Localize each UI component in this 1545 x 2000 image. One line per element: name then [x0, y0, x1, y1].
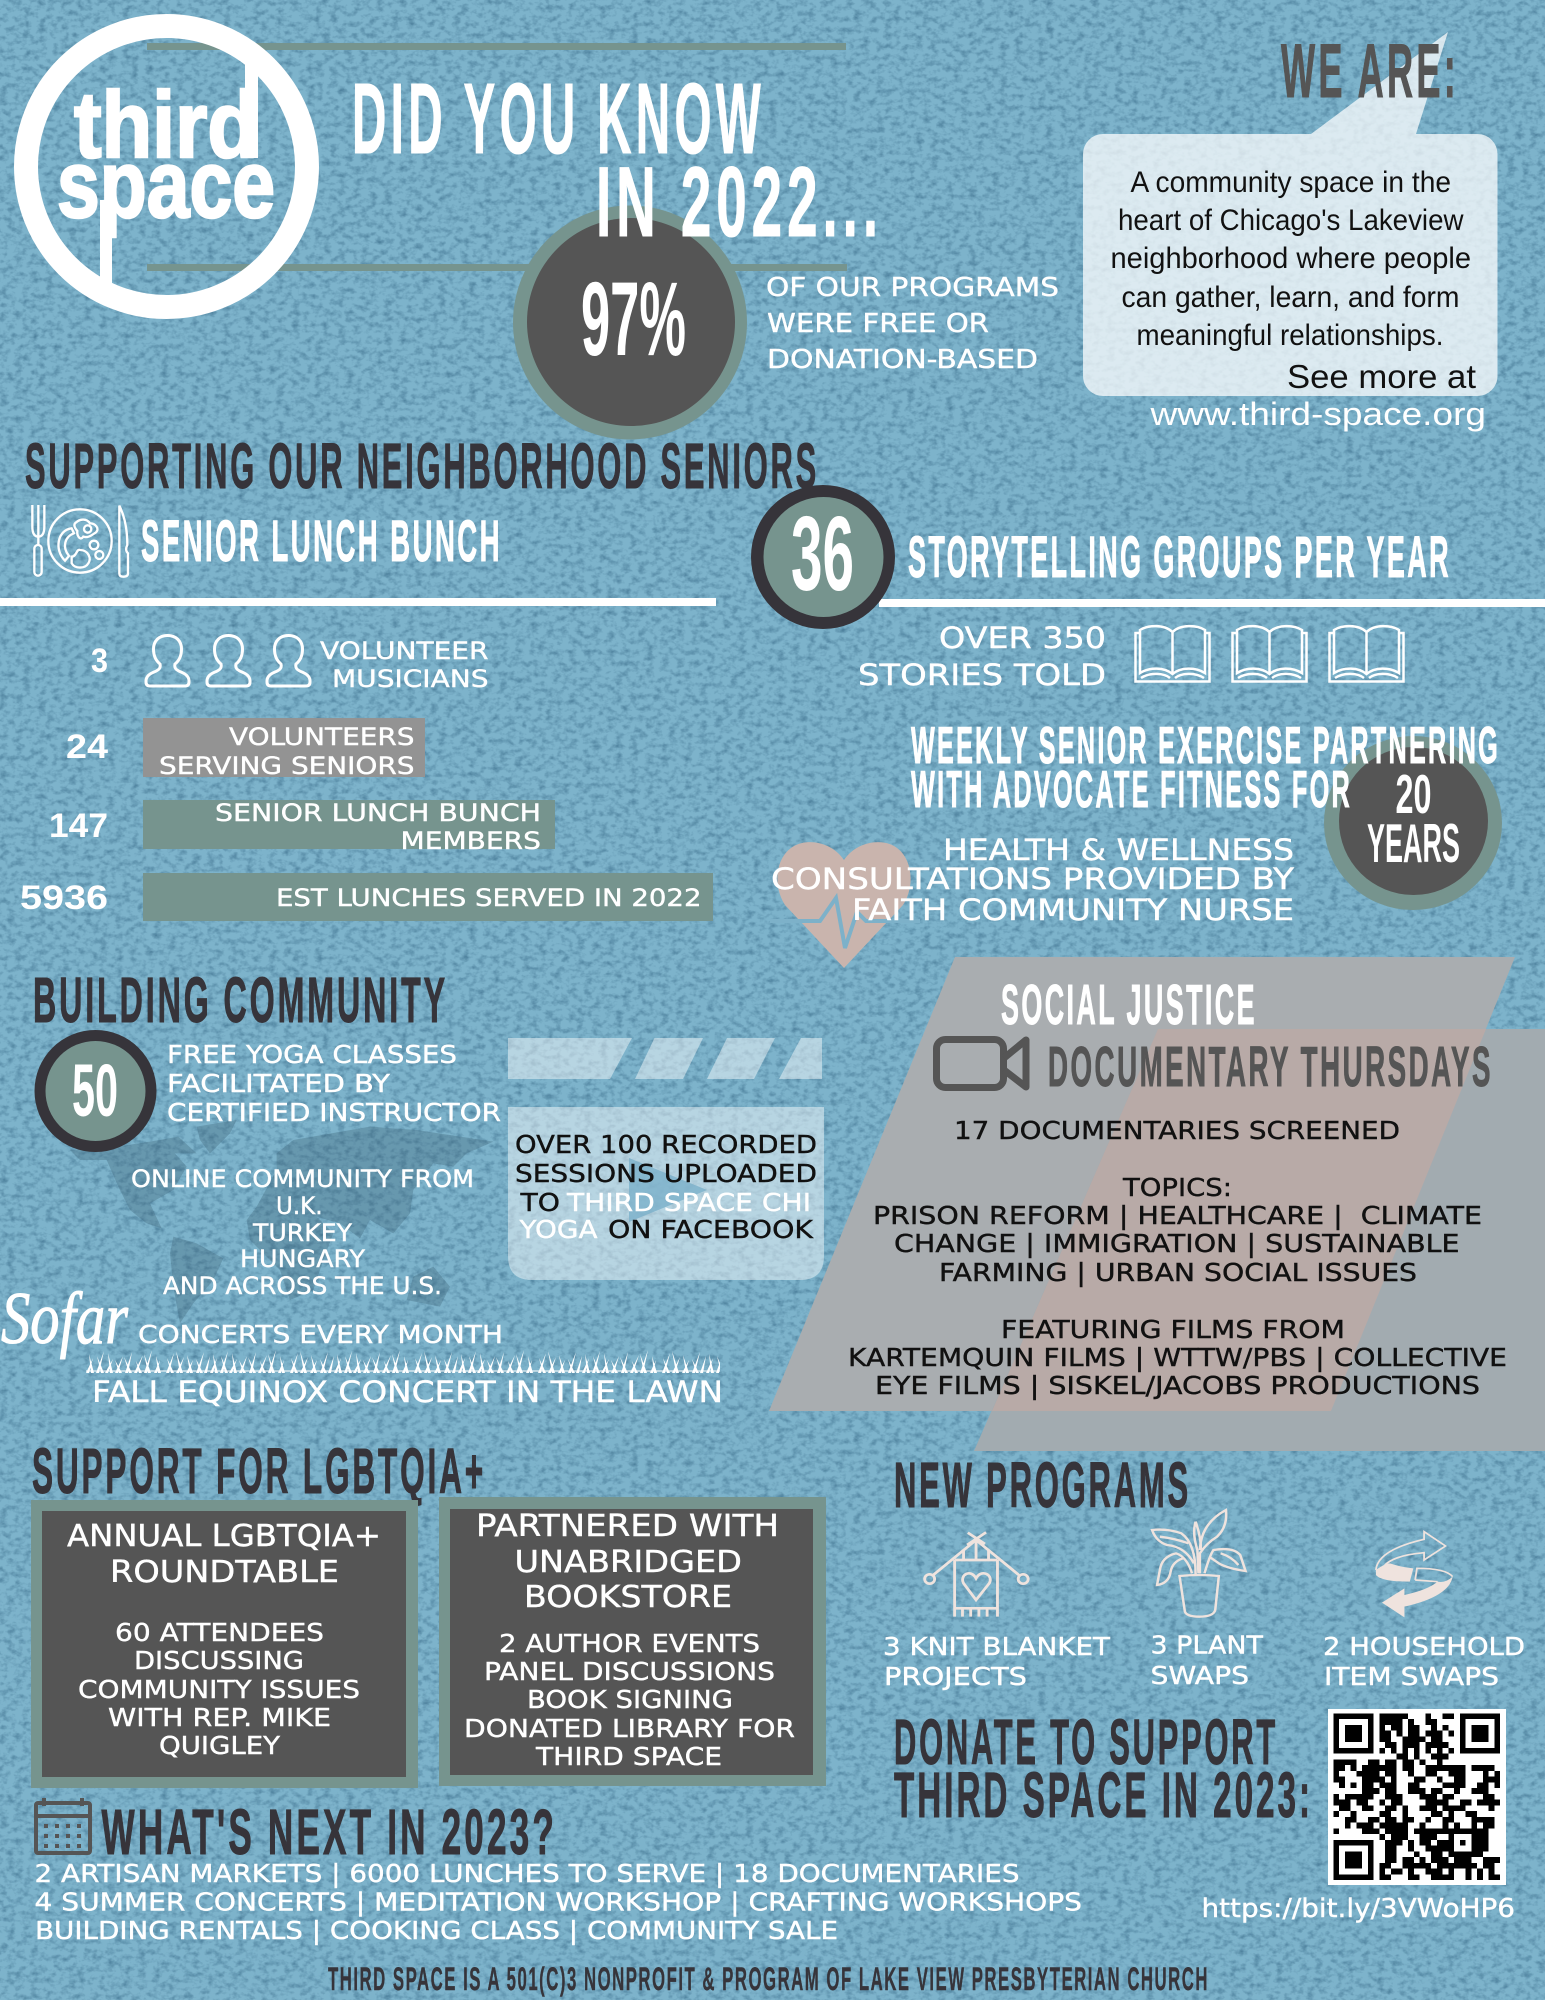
- text: household item swaps: ITEM SWAPS: [1324, 1662, 1499, 1691]
- bar: 24 volunteers serving seniors: [66, 718, 425, 780]
- panel: unabridged bookstore: BOOK SIGNING: [527, 1685, 733, 1714]
- stat circle: 20 years: 20: [1396, 763, 1432, 825]
- text: household item swaps: [1323, 1632, 1525, 1691]
- stat circle: 36: [751, 485, 895, 629]
- text: health and wellness consultations: FAITH COMMUNITY NURSE: [852, 893, 1294, 927]
- panel: lgbtqia roundtable: ROUNDTABLE: [110, 1555, 339, 1590]
- stat circle: 50: 50: [72, 1049, 118, 1132]
- title: [352, 63, 883, 257]
- icon: clapperboard with recorded sessions text: YOGA: [518, 1215, 598, 1244]
- heading: donate to support: [894, 1706, 1313, 1831]
- bar: 147 senior lunch bunch members: [49, 799, 555, 855]
- panel: lgbtqia roundtable: QUIGLEY: [159, 1731, 281, 1760]
- icon: clapperboard with recorded sessions text: [508, 1038, 824, 1280]
- heading: weekly senior exercise: [911, 717, 1500, 819]
- logo: third space: third: [74, 72, 258, 177]
- icon: knit blanket: [925, 1532, 1028, 1617]
- header rule lines: [147, 43, 847, 271]
- stat circle: 20 years: [1324, 736, 1502, 910]
- text: programs free or donation based: DONATION-BASED: [767, 345, 1038, 375]
- text: free yoga classes: FREE YOGA CLASSES: [167, 1040, 457, 1069]
- text: SOCIAL JUSTICE: [1001, 973, 1257, 1037]
- icon: plate with fork and knife: [32, 505, 128, 577]
- text: online community: [131, 1165, 474, 1300]
- bar: 5936 lunches served: [20, 873, 713, 921]
- bar: 147 senior lunch bunch members: MEMBERS: [400, 827, 541, 855]
- text: sofar concerts: CONCERTS EVERY MONTH: [138, 1320, 503, 1349]
- text: plans for 2023: [34, 1859, 1082, 1945]
- text: documentaries details: TOPICS:: [1122, 1173, 1232, 1202]
- speech bubble: we are: www.third-space.org: [1149, 396, 1486, 432]
- text: online community: AND ACROSS THE U.S.: [163, 1272, 442, 1300]
- logo: third space: space: [57, 131, 275, 238]
- stat circle: 36: 36: [791, 495, 854, 613]
- icon: clapperboard with recorded sessions text: THIRD SPACE CHI: [566, 1188, 811, 1217]
- panel: unabridged bookstore: THIRD SPACE: [535, 1742, 722, 1771]
- panel: unabridged bookstore: UNABRIDGED: [514, 1545, 742, 1580]
- text: online community: ONLINE COMMUNITY FROM: [131, 1165, 474, 1193]
- world map: [70, 1120, 493, 1323]
- heading: what's next in 2023: WHAT'S NEXT IN 2023?: [102, 1796, 557, 1868]
- icon: heart with pulse: [770, 842, 920, 968]
- text: SUPPORT FOR LGBTQIA+: [32, 1435, 486, 1507]
- panel: unabridged bookstore: DONATED LIBRARY FOR: [464, 1714, 795, 1743]
- text: documentaries details: EYE FILMS | SISKEL/JACOBS PRODUCTIONS: [875, 1371, 1480, 1400]
- icon: clapperboard with recorded sessions text: TO: [519, 1188, 560, 1217]
- speech bubble: we are: See more at: [1287, 358, 1476, 395]
- bar: 24 volunteers serving seniors: VOLUNTEERS: [229, 723, 414, 751]
- icon: clapperboard with recorded sessions text: SESSIONS UPLOADED: [515, 1159, 817, 1188]
- text: NEW PROGRAMS: [894, 1449, 1191, 1521]
- panel: unabridged bookstore: [439, 1497, 826, 1786]
- text: programs free or donation based: OF OUR PROGRAMS: [766, 273, 1059, 303]
- icon: clapperboard with recorded sessions text: ON FACEBOOK: [608, 1215, 814, 1244]
- panel: lgbtqia roundtable: WITH REP. MIKE: [108, 1703, 331, 1732]
- logo: third space: [26, 26, 307, 307]
- bar: 24 volunteers serving seniors: SERVING SENIORS: [159, 752, 414, 780]
- text: sofar concerts: Sofar: [1, 1278, 129, 1360]
- icon: swap arrows: [1376, 1532, 1453, 1617]
- text: documentaries details: [848, 1116, 1507, 1400]
- stat circle: 50: [34, 1030, 156, 1152]
- text: online community: HUNGARY: [240, 1245, 365, 1273]
- text: plans for 2023: 4 SUMMER CONCERTS | MEDITATION WORKSHOP | CRAFTING WORKSHOPS: [34, 1888, 1082, 1916]
- speech bubble: we are: meaningful relationships.: [1136, 319, 1444, 352]
- heading: building community: BUILDING COMMUNITY: [33, 964, 448, 1036]
- text: over 350 stories told: STORIES TOLD: [858, 658, 1106, 692]
- text: free yoga classes: FACILITATED BY: [167, 1069, 391, 1098]
- panel: unabridged bookstore: BOOKSTORE: [524, 1580, 732, 1615]
- text: documentaries details: 17 DOCUMENTARIES SCREENED: [954, 1116, 1400, 1145]
- title: IN 2022...: [596, 146, 883, 257]
- speech bubble: we are: heart of Chicago's Lakeview: [1118, 204, 1464, 237]
- stat circle: 97%: [513, 206, 747, 440]
- text: health and wellness consultations: HEALTH & WELLNESS: [943, 833, 1294, 867]
- text: plant swaps: [1150, 1630, 1264, 1690]
- divider left: [0, 598, 716, 606]
- illustration: grass: [86, 1350, 720, 1373]
- panel: lgbtqia roundtable: [31, 1500, 418, 1788]
- text: documentaries details: CHANGE | IMMIGRATION | SUSTAINABLE: [894, 1229, 1460, 1258]
- text: online community: U.K.: [276, 1192, 322, 1220]
- icon: clapperboard with recorded sessions text: OVER 100 RECORDED: [515, 1130, 817, 1159]
- icon: potted plant: [1152, 1510, 1246, 1617]
- text: online community: TURKEY: [252, 1219, 352, 1247]
- panel: unabridged bookstore: PARTNERED WITH: [476, 1509, 779, 1544]
- text: health and wellness consultations: CONSULTATIONS PROVIDED BY: [771, 862, 1294, 896]
- divider right: [879, 599, 1545, 607]
- row: 3 volunteer musicians: MUSICIANS: [332, 665, 488, 693]
- text: over 350 stories told: OVER 350: [939, 621, 1106, 655]
- text: programs free or donation based: WERE FREE OR: [767, 309, 989, 339]
- row: 3 volunteer musicians: 3: [91, 642, 108, 680]
- panel: social justice parallelograms: [769, 957, 1545, 1451]
- text: plant swaps: 3 PLANT: [1150, 1630, 1264, 1660]
- stat circle: 97%: 97%: [581, 261, 686, 378]
- bar: 5936 lunches served: 5936: [20, 879, 108, 917]
- text: plans for 2023: 2 ARTISAN MARKETS | 6000 LUNCHES TO SERVE | 18 DOCUMENTARIES: [34, 1859, 1019, 1888]
- panel: unabridged bookstore: PANEL DISCUSSIONS: [484, 1657, 775, 1686]
- icon: calendar: [36, 1798, 90, 1853]
- qr code: [1328, 1709, 1506, 1885]
- icon: video camera: [936, 1040, 1026, 1088]
- text: programs free or donation based: [766, 273, 1059, 375]
- bar: 147 senior lunch bunch members: 147: [49, 807, 108, 845]
- text: donation url: https://bit.ly/3VWoHP6: [1202, 1894, 1515, 1924]
- text: knit blanket projects: 3 KNIT BLANKET: [883, 1632, 1111, 1661]
- panel: unabridged bookstore: 2 AUTHOR EVENTS: [499, 1629, 760, 1658]
- panel: lgbtqia roundtable: COMMUNITY ISSUES: [78, 1675, 360, 1704]
- row: 3 volunteer musicians: VOLUNTEER: [320, 637, 488, 665]
- panel: lgbtqia roundtable: ANNUAL LGBTQIA+: [67, 1519, 381, 1554]
- speech bubble: we are: A community space in the: [1130, 166, 1451, 199]
- text: sofar concerts: [1, 1278, 503, 1360]
- text: documentaries details: KARTEMQUIN FILMS | WTTW/PBS | COLLECTIVE: [848, 1343, 1507, 1372]
- bar: 147 senior lunch bunch members: SENIOR LUNCH BUNCH: [215, 799, 541, 827]
- panel: lgbtqia roundtable: 60 ATTENDEES: [115, 1618, 324, 1647]
- text: over 350 stories told: [858, 621, 1106, 692]
- text: free yoga classes: [167, 1040, 501, 1127]
- text: plans for 2023: BUILDING RENTALS | COOKING CLASS | COMMUNITY SALE: [35, 1916, 838, 1945]
- text: documentaries details: FARMING | URBAN SOCIAL ISSUES: [939, 1258, 1417, 1287]
- bar: 5936 lunches served: EST LUNCHES SERVED IN 2022: [276, 884, 702, 912]
- text: knit blanket projects: PROJECTS: [884, 1662, 1027, 1691]
- title: DID YOU KNOW: [352, 63, 765, 175]
- text: free yoga classes: CERTIFIED INSTRUCTOR: [167, 1098, 501, 1127]
- icons: open books: [1136, 626, 1404, 682]
- panel: lgbtqia roundtable: DISCUSSING: [134, 1646, 304, 1675]
- text: health and wellness consultations: [771, 833, 1294, 927]
- speech bubble: we are: neighborhood where people: [1110, 242, 1471, 275]
- text: household item swaps: 2 HOUSEHOLD: [1323, 1632, 1525, 1661]
- text: knit blanket projects: [883, 1632, 1111, 1691]
- speech bubble: we are: [1083, 29, 1498, 432]
- bar: 24 volunteers serving seniors: 24: [66, 728, 108, 766]
- text: fall equinox concert: FALL EQUINOX CONCERT IN THE LAWN: [92, 1375, 723, 1409]
- text: plant swaps: SWAPS: [1150, 1661, 1249, 1690]
- row: 3 volunteer musicians: [91, 636, 488, 693]
- text: documentaries details: PRISON REFORM | HEALTHCARE | CLIMATE: [873, 1201, 1482, 1230]
- text: documentaries details: FEATURING FILMS FROM: [1001, 1315, 1345, 1344]
- text: SENIOR LUNCH BUNCH: [141, 509, 502, 574]
- speech bubble: we are: can gather, learn, and form: [1122, 281, 1460, 314]
